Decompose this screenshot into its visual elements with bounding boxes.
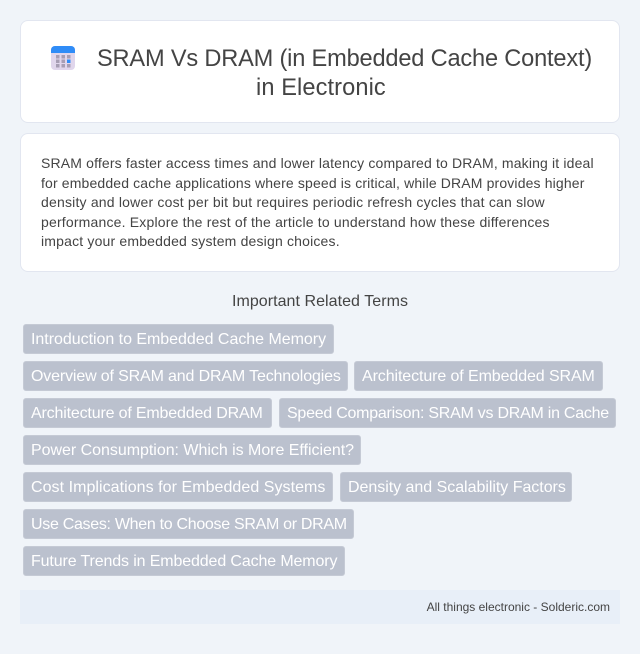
tag: Cost Implications for Embedded Systems bbox=[31, 479, 325, 496]
tag: Use Cases: When to Choose SRAM or DRAM bbox=[31, 516, 347, 533]
description text bbox=[41, 155, 594, 249]
tag bbox=[354, 361, 603, 391]
heading: important related terms: Important Related Terms bbox=[232, 293, 408, 310]
title bbox=[97, 46, 592, 101]
tag: Density and Scalability Factors bbox=[348, 479, 566, 496]
footer bbox=[20, 590, 620, 624]
title: SRAM Vs DRAM (in Embedded Cache Context) bbox=[97, 46, 592, 72]
tag bbox=[23, 361, 348, 391]
tag bbox=[23, 398, 272, 428]
tag: Future Trends in Embedded Cache Memory bbox=[31, 553, 337, 570]
icon: calendar grid bbox=[51, 46, 75, 70]
tag: Overview of SRAM and DRAM Technologies bbox=[31, 368, 341, 385]
tag bbox=[279, 398, 616, 428]
tag bbox=[23, 324, 334, 354]
description text: performance. Explore the rest of the article to understand how these differences bbox=[41, 214, 550, 230]
description text: for embedded cache applications where speed is critical, while DRAM provides higher bbox=[41, 175, 585, 191]
panel: title card bbox=[20, 20, 620, 123]
panel: related terms tags bbox=[23, 324, 616, 576]
description text: impact your embedded system design choices. bbox=[41, 233, 340, 249]
title: in Electronic bbox=[256, 75, 386, 101]
panel: description bbox=[20, 133, 620, 272]
tag bbox=[23, 509, 354, 539]
tag: Architecture of Embedded DRAM bbox=[31, 405, 263, 422]
tag bbox=[23, 546, 345, 576]
tag bbox=[23, 435, 361, 465]
tag bbox=[23, 472, 333, 502]
tag: Introduction to Embedded Cache Memory bbox=[31, 331, 326, 348]
description text: density and lower cost per bit but requires periodic refresh cycles that can slow bbox=[41, 194, 545, 210]
tag: Speed Comparison: SRAM vs DRAM in Cache bbox=[287, 405, 609, 422]
tag: Architecture of Embedded SRAM bbox=[362, 368, 595, 385]
tag: Power Consumption: Which is More Efficient? bbox=[31, 442, 354, 459]
footer credit: All things electronic - Solderic.com bbox=[427, 600, 610, 614]
description text: SRAM offers faster access times and lower latency compared to DRAM, making it ideal bbox=[41, 155, 594, 171]
tag bbox=[340, 472, 572, 502]
